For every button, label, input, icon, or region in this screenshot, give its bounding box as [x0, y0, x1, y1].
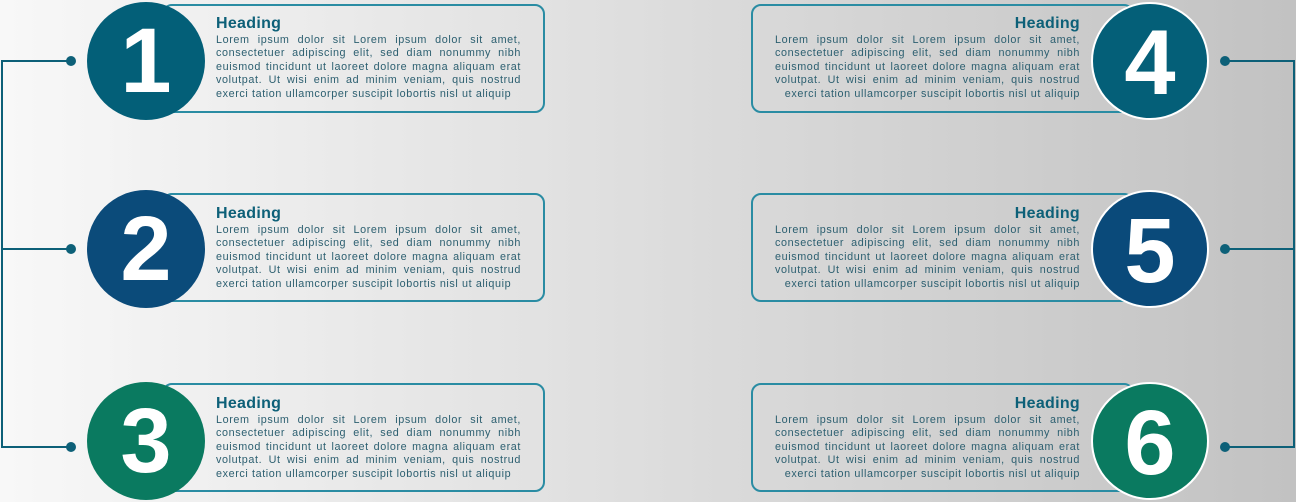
text 5: euismod tincidunt ut laoreet dolore magna aliquam erat: [775, 251, 1080, 263]
text 2: consectetuer adipiscing elit, sed diam nonummy nibh: [216, 237, 521, 249]
text 4: [775, 15, 1080, 100]
circle 6: 6: [1124, 392, 1176, 494]
text 1: [216, 15, 521, 100]
text 3: exerci tation ullamcorper suscipit lobortis nisl ut aliquip: [216, 468, 511, 480]
text 2: euismod tincidunt ut laoreet dolore magna aliquam erat: [216, 251, 521, 263]
text 4: euismod tincidunt ut laoreet dolore magna aliquam erat: [775, 61, 1080, 73]
text 5: Heading: [1015, 205, 1080, 222]
text 3: consectetuer adipiscing elit, sed diam nonummy nibh: [216, 427, 521, 439]
text 2: volutpat. Ut wisi enim ad minim veniam, quis nostrud: [216, 264, 521, 276]
text 5: Lorem ipsum dolor sit Lorem ipsum dolor sit amet,: [775, 224, 1080, 236]
text 5: [775, 205, 1080, 290]
panel 2 box: [162, 193, 545, 302]
text 4: Heading: [1015, 15, 1080, 32]
text 2: Heading: [216, 205, 281, 222]
text 1: Lorem ipsum dolor sit Lorem ipsum dolor sit amet,: [216, 34, 521, 46]
text 2: Lorem ipsum dolor sit Lorem ipsum dolor sit amet,: [216, 224, 521, 236]
text 6: [775, 395, 1080, 480]
text 1: Heading: [216, 15, 281, 32]
text 1: volutpat. Ut wisi enim ad minim veniam, quis nostrud: [216, 74, 521, 86]
text 6: consectetuer adipiscing elit, sed diam nonummy nibh: [775, 427, 1080, 439]
circle 3: 3: [120, 390, 172, 492]
panel 6 box: [751, 383, 1134, 492]
circle 4: 4: [1124, 12, 1176, 114]
circle 1: 1: [120, 10, 172, 112]
circle 5: [1091, 190, 1209, 308]
text 5: consectetuer adipiscing elit, sed diam nonummy nibh: [775, 237, 1080, 249]
circle 1: [87, 2, 205, 120]
panel 4 box: [751, 4, 1134, 113]
circle 2: [87, 190, 205, 308]
text 3: Heading: [216, 395, 281, 412]
text 4: volutpat. Ut wisi enim ad minim veniam, quis nostrud: [775, 74, 1080, 86]
connector: left: [1, 56, 76, 452]
text 4: consectetuer adipiscing elit, sed diam nonummy nibh: [775, 47, 1080, 59]
text 1: exerci tation ullamcorper suscipit lobortis nisl ut aliquip: [216, 88, 511, 100]
text 1: consectetuer adipiscing elit, sed diam nonummy nibh: [216, 47, 521, 59]
text 3: [216, 395, 521, 480]
text 6: Heading: [1015, 395, 1080, 412]
text 4: Lorem ipsum dolor sit Lorem ipsum dolor sit amet,: [775, 34, 1080, 46]
text 5: exerci tation ullamcorper suscipit lobortis nisl ut aliquip: [785, 278, 1080, 290]
text 1: euismod tincidunt ut laoreet dolore magna aliquam erat: [216, 61, 521, 73]
text 6: volutpat. Ut wisi enim ad minim veniam, quis nostrud: [775, 454, 1080, 466]
circle 6: [1091, 382, 1209, 500]
text 6: euismod tincidunt ut laoreet dolore magna aliquam erat: [775, 441, 1080, 453]
text 3: volutpat. Ut wisi enim ad minim veniam, quis nostrud: [216, 454, 521, 466]
text 5: volutpat. Ut wisi enim ad minim veniam, quis nostrud: [775, 264, 1080, 276]
circle 2: 2: [120, 198, 172, 300]
panel 1 box: [162, 4, 545, 113]
circle 5: 5: [1124, 200, 1176, 302]
panel 5 box: [751, 193, 1134, 302]
text 2: exerci tation ullamcorper suscipit lobortis nisl ut aliquip: [216, 278, 511, 290]
text 4: exerci tation ullamcorper suscipit lobortis nisl ut aliquip: [785, 88, 1080, 100]
connector: right: [1220, 56, 1295, 452]
circle 4: [1091, 2, 1209, 120]
text 2: [216, 205, 521, 290]
panel 3 box: [162, 383, 545, 492]
text 3: Lorem ipsum dolor sit Lorem ipsum dolor sit amet,: [216, 414, 521, 426]
text 6: Lorem ipsum dolor sit Lorem ipsum dolor sit amet,: [775, 414, 1080, 426]
text 6: exerci tation ullamcorper suscipit lobortis nisl ut aliquip: [785, 468, 1080, 480]
circle 3: [87, 382, 205, 500]
text 3: euismod tincidunt ut laoreet dolore magna aliquam erat: [216, 441, 521, 453]
